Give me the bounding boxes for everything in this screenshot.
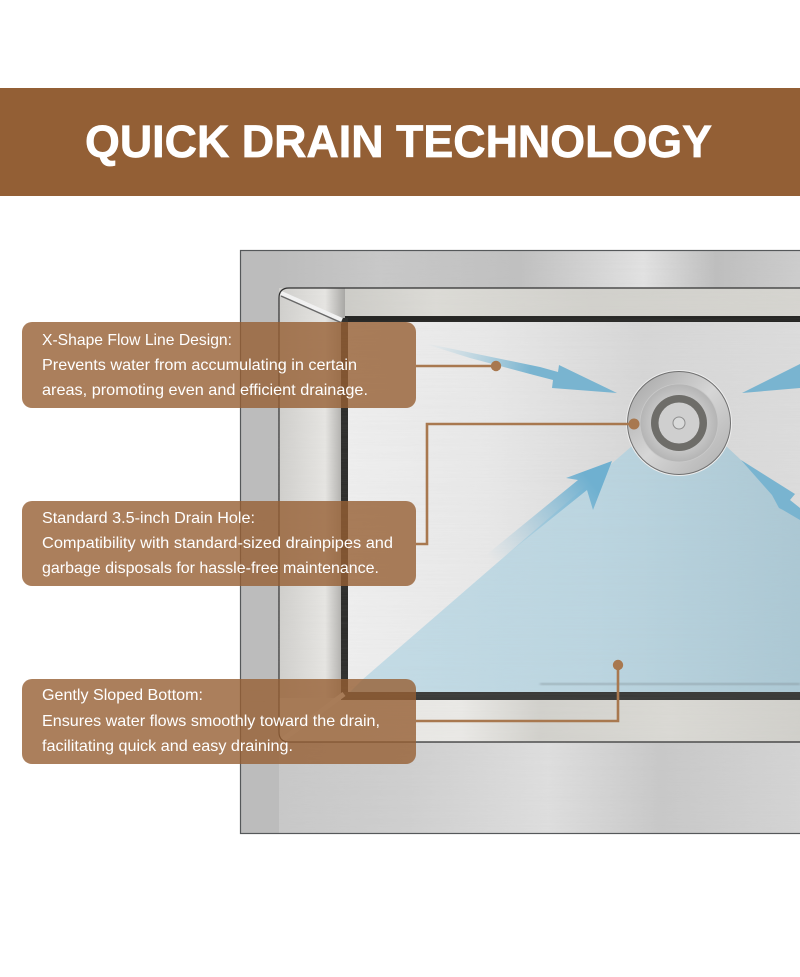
connector: x-shape to arrow bbox=[416, 361, 501, 371]
sloped bottom description: Ensures water flows smoothly toward the drain, bbox=[42, 713, 380, 730]
arrow: lower right bbox=[741, 460, 800, 520]
drain bbox=[626, 370, 732, 476]
header banner bbox=[0, 88, 800, 196]
arrow: lower left bbox=[480, 461, 612, 560]
basin dark edges bbox=[345, 316, 800, 322]
sloped bottom description: facilitating quick and easy draining. bbox=[42, 738, 293, 755]
arrow: upper left bbox=[419, 342, 617, 393]
x-shape heading: X-Shape Flow Line Design: bbox=[42, 332, 232, 349]
corner seam: bottom left bbox=[281, 694, 344, 741]
arrow: upper right bbox=[742, 364, 800, 393]
corner seam: top left bbox=[281, 293, 342, 320]
connector: drain hole to drain bbox=[416, 418, 640, 544]
x-shape description: Prevents water from accumulating in certain bbox=[42, 357, 357, 374]
x-shape description: areas, promoting even and efficient drainage. bbox=[42, 382, 368, 399]
callout: sloped bottom bbox=[22, 679, 416, 764]
sloped bottom heading: Gently Sloped Bottom: bbox=[42, 687, 203, 704]
callout: drain hole bbox=[22, 501, 416, 586]
drain hole description: Compatibility with standard-sized drainpipes and bbox=[42, 535, 393, 552]
drain hole heading: Standard 3.5-inch Drain Hole: bbox=[42, 510, 255, 527]
drain hole description bbox=[42, 535, 393, 577]
sloped bottom description bbox=[42, 713, 380, 755]
drain hole description: garbage disposals for hassle-free maintenance. bbox=[42, 560, 379, 577]
connector: sloped bottom to floor bbox=[416, 660, 623, 721]
opening outline bbox=[279, 288, 800, 742]
sink photo bbox=[240, 250, 800, 834]
callout: x-shape flow line bbox=[22, 322, 416, 408]
title: QUICK DRAIN TECHNOLOGY bbox=[85, 116, 712, 167]
x-shape description bbox=[42, 357, 368, 399]
water pool with blue tint bbox=[350, 446, 800, 692]
